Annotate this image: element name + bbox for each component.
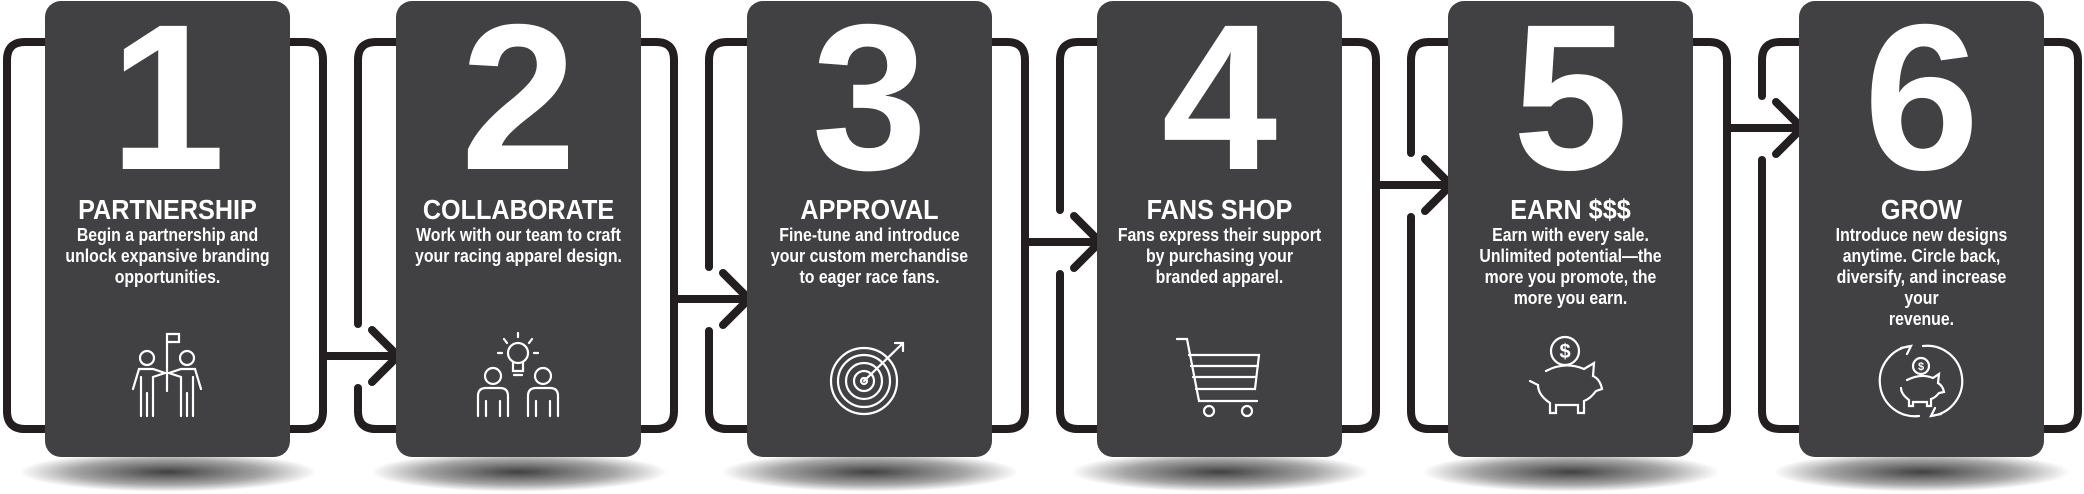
text block: more you promote, the: [1485, 267, 1656, 287]
text block: Earn with every sale.: [1492, 225, 1649, 245]
icon: piggy bank: $: [1559, 341, 1571, 363]
panel: step 6 grow: [1799, 1, 2044, 457]
panel: step 5 earn: [1448, 1, 1693, 457]
text block: your: [1904, 288, 1939, 308]
text block: [771, 225, 968, 287]
heading: PARTNERSHIP: [78, 194, 257, 225]
icon: team with lightbulb: [476, 332, 560, 418]
text block: more you earn.: [1514, 288, 1627, 308]
arrow 4 to 5: [1376, 159, 1451, 211]
text block: branded apparel.: [1156, 267, 1283, 287]
arrow 3 to 4: [1025, 216, 1100, 268]
text block: [65, 225, 270, 287]
text block: anytime. Circle back,: [1843, 246, 2000, 266]
text block: Work with our team to craft: [416, 225, 621, 245]
heading: APPROVAL: [800, 194, 939, 225]
icon: partners with flag: [132, 332, 202, 418]
panel: step 3 approval: [747, 1, 992, 457]
text block: [1836, 225, 2007, 329]
text block: Fans express their support: [1118, 225, 1321, 245]
icon: piggy bank: [1528, 336, 1604, 414]
arrow 2 to 3: [674, 273, 749, 325]
icon: target: [830, 342, 904, 416]
panel: step 4 fans shop: [1097, 1, 1342, 457]
text block: your custom merchandise: [771, 246, 968, 266]
text block: Fine-tune and introduce: [779, 225, 960, 245]
heading: COLLABORATE: [423, 194, 614, 225]
text block: to eager race fans.: [799, 267, 939, 287]
text block: [1479, 225, 1662, 308]
icon: piggy bank cycle: $: [1918, 361, 1924, 373]
heading: GROW: [1881, 194, 1962, 225]
panel: step 1 partnership: [45, 1, 290, 457]
arrow 1 to 2: [323, 330, 398, 382]
heading: FANS SHOP: [1147, 194, 1292, 225]
panel: step 2 collaborate: [396, 1, 641, 457]
text block: [415, 225, 622, 266]
icon: piggy bank cycle: [1878, 344, 1964, 418]
text block: revenue.: [1889, 309, 1954, 329]
text block: your racing apparel design.: [415, 246, 622, 266]
arrow 5 to 6: [1727, 102, 1802, 154]
text block: Introduce new designs: [1836, 225, 2007, 245]
text block: unlock expansive branding: [65, 246, 270, 266]
icon: shopping cart: [1176, 338, 1260, 418]
text block: by purchasing your: [1146, 246, 1293, 266]
text block: opportunities.: [115, 267, 220, 287]
text block: Unlimited potential—the: [1479, 246, 1662, 266]
text block: Begin a partnership and: [77, 225, 258, 245]
text block: diversify, and increase: [1837, 267, 2006, 287]
text block: [1118, 225, 1321, 287]
heading: EARN $$$: [1510, 194, 1631, 225]
